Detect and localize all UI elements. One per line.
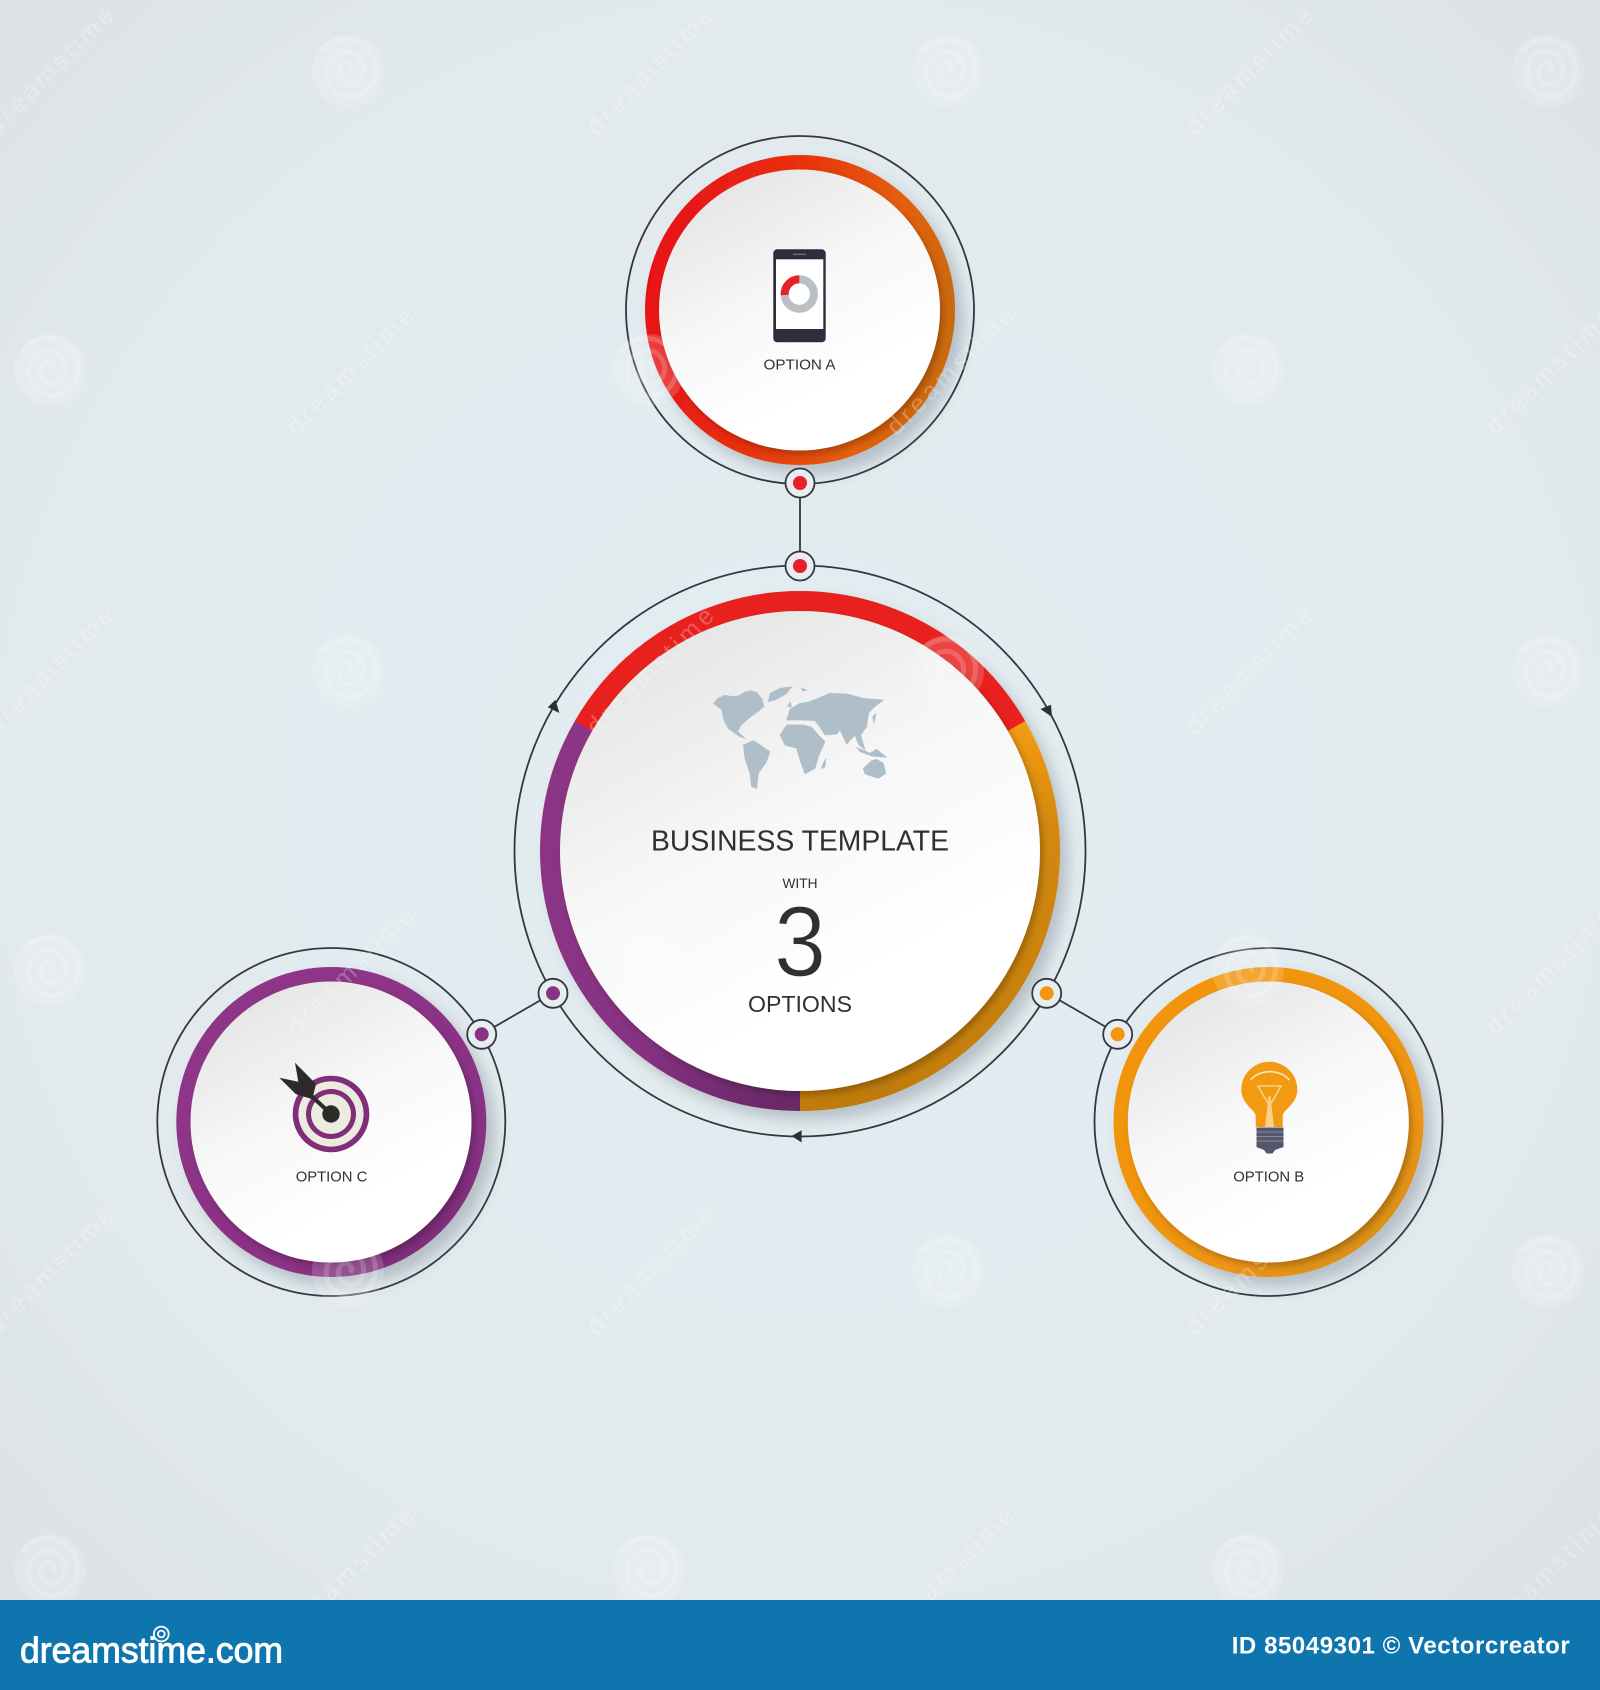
watermark text: dreamstime <box>881 902 1020 1041</box>
node: center red <box>786 552 814 580</box>
footer logo text: dreamstime.com <box>20 1630 283 1671</box>
icon: target with dart <box>279 1063 369 1152</box>
option C orbit line <box>157 948 505 1296</box>
text: options: OPTIONS <box>748 991 852 1017</box>
option C paper disc <box>190 982 472 1262</box>
text: with: WITH <box>782 875 818 891</box>
panel: option C <box>157 948 505 1296</box>
watermark text: dreamstime <box>281 902 420 1041</box>
icon: footer swirl <box>154 1627 169 1641</box>
panel: option A <box>626 136 974 484</box>
node: option A outer <box>786 468 814 498</box>
label: option C: OPTION C <box>296 1168 367 1186</box>
node: center purple <box>538 979 568 1008</box>
option B orbit line <box>1094 948 1442 1296</box>
panel: central circle <box>514 566 1086 1136</box>
icon: world map <box>713 687 887 788</box>
option C ring <box>176 967 486 1277</box>
central ring drop shadow <box>541 592 1059 1110</box>
node: option B outer <box>1103 1020 1132 1049</box>
panel: option B <box>1094 948 1442 1296</box>
ring segment: orange <box>800 726 1050 1101</box>
watermark text: dreamstime <box>1180 602 1319 741</box>
node: center orange <box>1032 979 1061 1008</box>
central paper disc <box>560 611 1040 1091</box>
watermark text: dreamstime <box>881 302 1020 441</box>
ring segment: red <box>584 601 1016 726</box>
arrow: bottom orbit <box>792 1130 802 1142</box>
footer band <box>0 1600 1600 1690</box>
node: option C outer <box>467 1020 496 1049</box>
watermark text: dreamstime <box>581 1202 720 1341</box>
connector lines <box>482 498 1118 1034</box>
option B ring <box>1114 967 1424 1277</box>
watermark text: dreamstime <box>1180 1202 1319 1341</box>
label: option B: OPTION B <box>1233 1168 1304 1186</box>
watermark text: dreamstime <box>581 602 720 741</box>
option B paper disc <box>1128 982 1409 1262</box>
icon: smartphone with donut chart <box>773 249 826 342</box>
title: business template: BUSINESS TEMPLATE <box>651 826 949 858</box>
option A paper disc <box>659 170 940 450</box>
number: 3: 3 <box>774 886 826 998</box>
arrow: left orbit <box>548 700 559 713</box>
watermark text: dreamstime <box>1180 2 1319 141</box>
central orbit line <box>514 566 1086 1136</box>
option A orbit line <box>626 136 974 484</box>
watermark text: dreamstime <box>281 1502 420 1641</box>
label: option A: OPTION A <box>764 356 836 374</box>
watermark text: dreamstime <box>581 2 720 141</box>
footer credit: ID 85049301 © Vectorcreator <box>1232 1632 1570 1659</box>
icon: light bulb <box>1241 1062 1297 1154</box>
option A ring <box>645 155 955 465</box>
watermark text: dreamstime <box>881 1502 1020 1641</box>
ring segment: purple <box>550 726 800 1101</box>
watermark text: dreamstime <box>281 302 420 441</box>
arrow: right orbit <box>1040 705 1052 717</box>
